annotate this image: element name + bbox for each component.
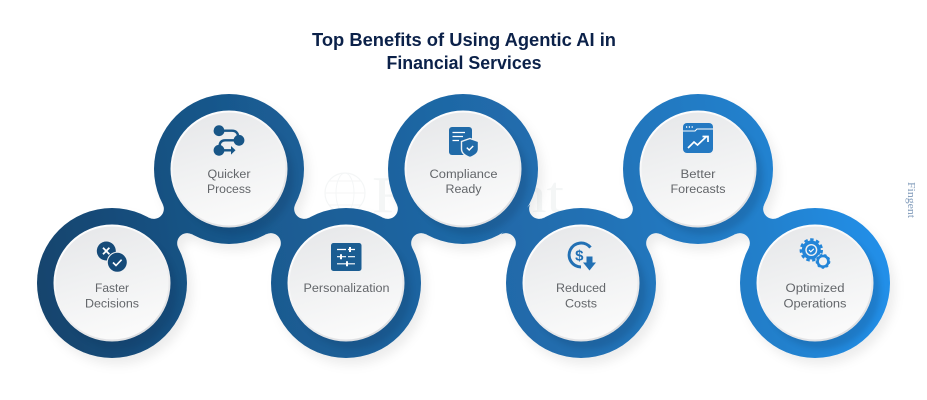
label (430, 167, 498, 196)
label: Better (680, 167, 716, 181)
benefit: Better Forecasts (640, 110, 756, 228)
benefit: Faster Decisions (54, 224, 170, 342)
vertical Fingent brand mark: Fingent (905, 182, 916, 218)
label: Optimized (786, 281, 845, 295)
benefit: Personalization (288, 224, 404, 342)
icon: gears (801, 240, 831, 269)
icon: document with shield (449, 127, 478, 158)
label (207, 167, 251, 196)
watermark: Fingent logo (325, 167, 581, 230)
watermark: Fingent logo: Fingent (372, 167, 565, 224)
label: Decisions (85, 296, 139, 310)
label (556, 281, 606, 310)
title: Top Benefits of Using Agentic AI in (312, 29, 616, 50)
benefit: Optimized Operations (756, 224, 874, 342)
label: Operations (784, 296, 846, 310)
icon: sliders (331, 243, 362, 271)
label (85, 281, 139, 310)
label: Quicker (208, 167, 250, 181)
icon: dollar with down arrow: $ (575, 248, 584, 264)
title (312, 29, 616, 73)
icon: process flow (214, 125, 244, 156)
label: Personalization (304, 281, 390, 295)
label: Faster (95, 281, 129, 295)
watermark: Fingent logo: Shaping the future (500, 218, 581, 230)
label: Compliance (430, 167, 498, 181)
icon: cross and check (97, 242, 128, 273)
label: Process (207, 182, 251, 196)
ring inner shading (108, 134, 882, 350)
benefit: Quicker Process (170, 110, 288, 228)
label: Costs (565, 296, 597, 310)
benefit: Compliance Ready (404, 110, 522, 228)
title: Financial Services (386, 52, 542, 73)
label (784, 281, 846, 310)
label: Reduced (556, 281, 606, 295)
label (670, 167, 726, 196)
label: Forecasts (670, 182, 726, 196)
icon: chart window (683, 123, 713, 153)
benefit: Reduced Costs (522, 224, 640, 342)
label: Ready (446, 182, 482, 196)
connected ring chain (37, 94, 890, 358)
